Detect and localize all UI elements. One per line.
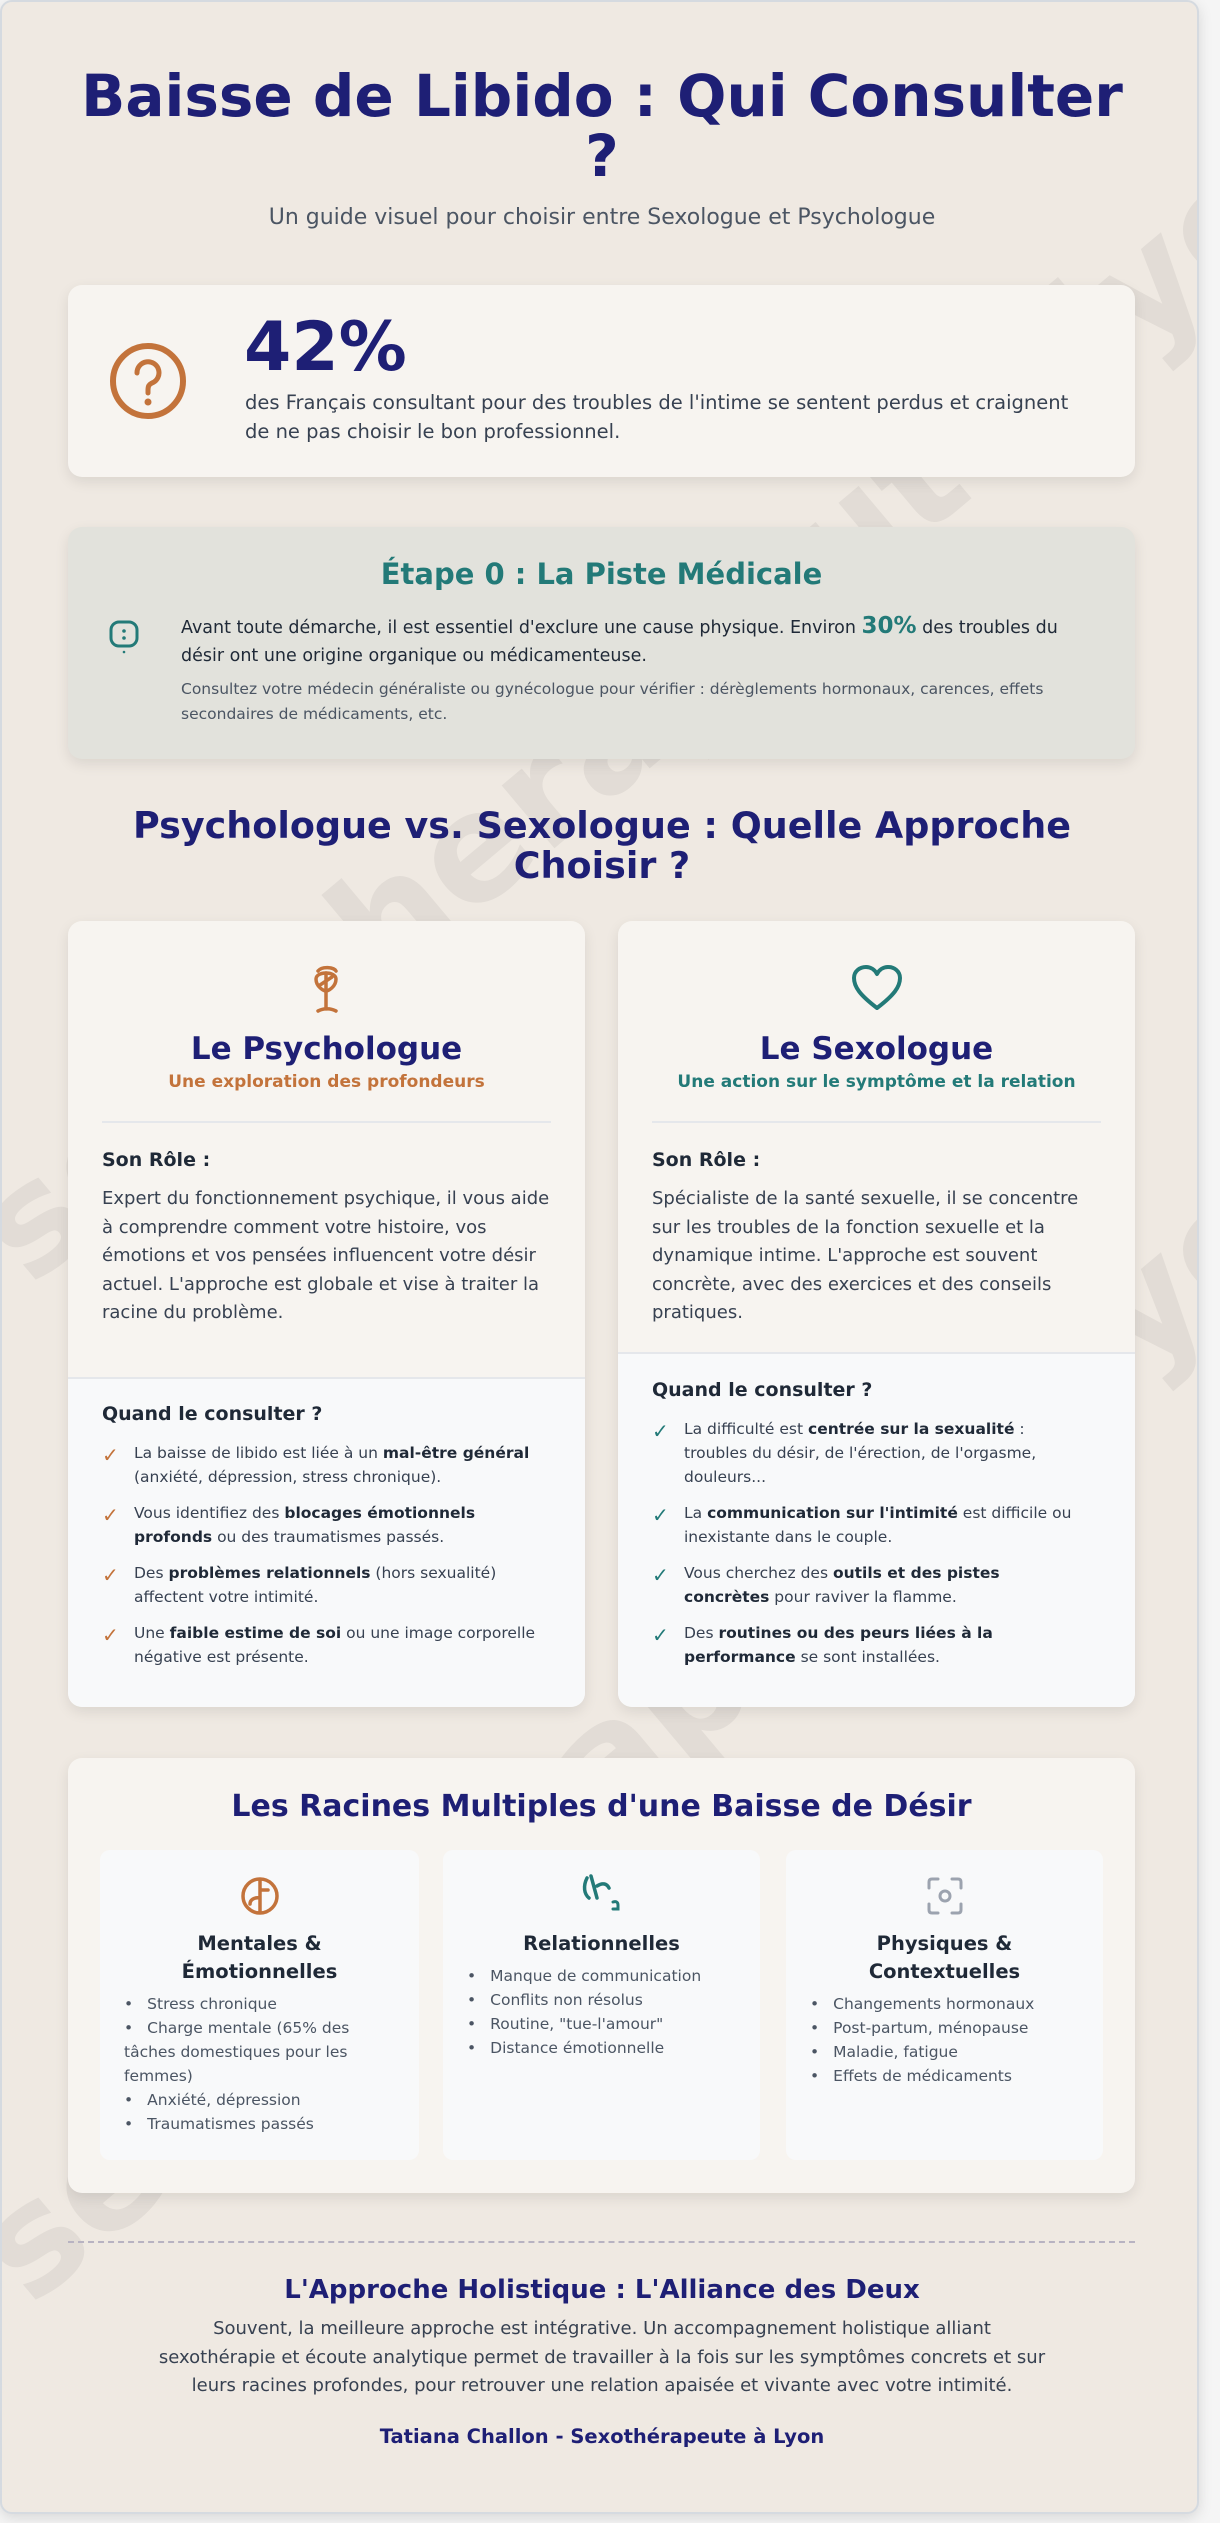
- stat number: 42%: [244, 308, 407, 387]
- panel: racines: [68, 1758, 1135, 2193]
- sub-panel: mentales: Charge mentale (65% des tâches domestiques pour les femmes): [124, 2019, 349, 2085]
- sub-panel: relationnelles: Conflits non résolus: [490, 1991, 643, 2009]
- sub-panel: mentales: Anxiété, dépression: [147, 2091, 301, 2109]
- conclusion heading: L'Approche Holistique : L'Alliance des Deux: [284, 2275, 920, 2305]
- heading: psychologue: Le Psychologue: [191, 1031, 462, 1067]
- panel: etape 0: [68, 527, 1135, 759]
- sub-panel: mentales: Stress chronique: [147, 1995, 277, 2013]
- when: sexologue: Quand le consulter ?: [652, 1379, 872, 1401]
- subtitle: psychologue: Une exploration des profondeurs: [168, 1072, 485, 1092]
- when: psychologue: La baisse de libido est liée à un mal-être général (anxiété, dépression, stress chronique).: [134, 1444, 529, 1486]
- icon: medical: [110, 620, 138, 654]
- when: psychologue: Vous identifiez des blocages émotionnels profonds ou des traumatismes passés.: [134, 1504, 475, 1546]
- title: [81, 62, 1123, 190]
- icon: question circle: [110, 343, 186, 419]
- sub-panel: relationnelles: Relationnelles: [523, 1932, 680, 1955]
- title: Baisse de Libido : Qui Consulter: [81, 62, 1123, 130]
- sub-panel: mentales: Mentales &: [197, 1932, 322, 1955]
- sub-panel: relationnelles: Manque de communication: [490, 1967, 701, 1985]
- role: psychologue: Son Rôle :: [102, 1149, 210, 1171]
- when: sexologue: La difficulté est centrée sur la sexualité : troubles du désir, de l'érection, de l'orgasme, douleurs...: [684, 1420, 1036, 1486]
- sub-panel: physiques: Physiques &: [877, 1932, 1012, 1955]
- text: medical: Avant toute démarche, il est essentiel d'exclure une cause physique. Environ 30% des troubles du désir ont une origine organique ou médicamenteuse.: [181, 613, 1058, 666]
- when: sexologue: Des routines ou des peurs liées à la performance se sont installées.: [684, 1624, 993, 1666]
- when: sexologue: ✓: [652, 1419, 669, 1443]
- sub-panel: physiques: Post-partum, ménopause: [833, 2019, 1028, 2037]
- conclusion text: [159, 2318, 1046, 2396]
- panel: sexologue: [618, 921, 1135, 1707]
- sub-panel: physiques: Maladie, fatigue: [833, 2043, 958, 2061]
- when: sexologue: Vous cherchez des outils et des pistes concrètes pour raviver la flamme.: [684, 1564, 1000, 1606]
- heading: racines: Les Racines Multiples d'une Baisse de Désir: [231, 1789, 972, 1824]
- when: sexologue: ✓: [652, 1503, 669, 1527]
- sub-panel: physiques: Effets de médicaments: [833, 2067, 1012, 2085]
- signature: Tatiana Challon - Sexothérapeute à Lyon: [380, 2425, 824, 2448]
- section heading: Psychologue vs. Sexologue : Quelle Approche Choisir ?: [133, 804, 1071, 887]
- conclusion text: Souvent, la meilleure approche est intégrative. Un accompagnement holistique alliant: [213, 2318, 991, 2339]
- note: medical: Consultez votre médecin généraliste ou gynécologue pour vérifier : dérèglements hormonaux, carences, effets secondaires de médicaments, etc.: [181, 680, 1043, 723]
- when: psychologue: ✓: [102, 1443, 119, 1467]
- stat card: [68, 285, 1135, 477]
- when: psychologue: Une faible estime de soi ou une image corporelle négative est présente.: [134, 1624, 535, 1666]
- panel: psychologue: [68, 921, 585, 1707]
- sub-panel: relationnelles: Distance émotionnelle: [490, 2039, 664, 2057]
- when: sexologue: ✓: [652, 1563, 669, 1587]
- when: sexologue: La communication sur l'intimité est difficile ou inexistante dans le couple.: [684, 1504, 1071, 1546]
- icon: focus: [928, 1878, 962, 1914]
- sub-panel: physiques: [786, 1850, 1103, 2160]
- icon: relation: [582, 1874, 620, 1910]
- sub-panel: physiques: Contextuelles: [869, 1960, 1020, 1983]
- sub-panel: mentales: [100, 1850, 419, 2160]
- sub-panel: mentales: Traumatismes passés: [147, 2115, 314, 2133]
- icon: mind: [241, 1877, 279, 1915]
- subtitle: Un guide visuel pour choisir entre Sexologue et Psychologue: [269, 205, 935, 230]
- when: psychologue: Quand le consulter ?: [102, 1403, 322, 1425]
- icon: heart: [852, 965, 902, 1010]
- role: psychologue: Expert du fonctionnement psychique, il vous aide à comprendre comment votre histoire, vos émotions et vos pensées influencent votre désir actuel. L'approche est globale et vise à traiter la racine du problème.: [102, 1188, 549, 1323]
- icon: psyche: [314, 966, 338, 1013]
- sub-panel: relationnelles: Routine, "tue-l'amour": [490, 2015, 663, 2033]
- conclusion text: sexothérapie et écoute analytique permet de travailler à la fois sur les symptômes concrets et sur leurs racines profondes, pour retrouver une relation apaisée et vivante avec votre intimité.: [159, 2346, 1045, 2396]
- when: psychologue: [102, 1403, 535, 1666]
- when: psychologue: ✓: [102, 1563, 119, 1587]
- role: sexologue: Spécialiste de la santé sexuelle, il se concentre sur les troubles de la fonction sexuelle et la dynamique intime. L'approche est souvent concrète, avec des exercices et des conseils pratiques.: [652, 1188, 1078, 1323]
- when: sexologue: [652, 1379, 1071, 1666]
- when: psychologue: Des problèmes relationnels (hors sexualité) affectent votre intimité.: [134, 1564, 496, 1606]
- sub-panel: relationnelles: [443, 1850, 760, 2160]
- sub-panel: mentales: Émotionnelles: [182, 1960, 337, 1983]
- role: sexologue: Son Rôle :: [652, 1149, 760, 1171]
- heading: sexologue: Le Sexologue: [760, 1031, 993, 1067]
- subtitle: sexologue: Une action sur le symptôme et la relation: [677, 1072, 1076, 1092]
- stat text: des Français consultant pour des troubles de l'intime se sentent perdus et craignent de ne pas choisir le bon professionnel.: [245, 391, 1068, 443]
- when: psychologue: ✓: [102, 1503, 119, 1527]
- when: sexologue: ✓: [652, 1623, 669, 1647]
- title: ?: [585, 122, 619, 190]
- when: psychologue: ✓: [102, 1623, 119, 1647]
- sub-panel: physiques: Changements hormonaux: [833, 1995, 1034, 2013]
- heading: etape 0: Étape 0 : La Piste Médicale: [381, 557, 822, 591]
